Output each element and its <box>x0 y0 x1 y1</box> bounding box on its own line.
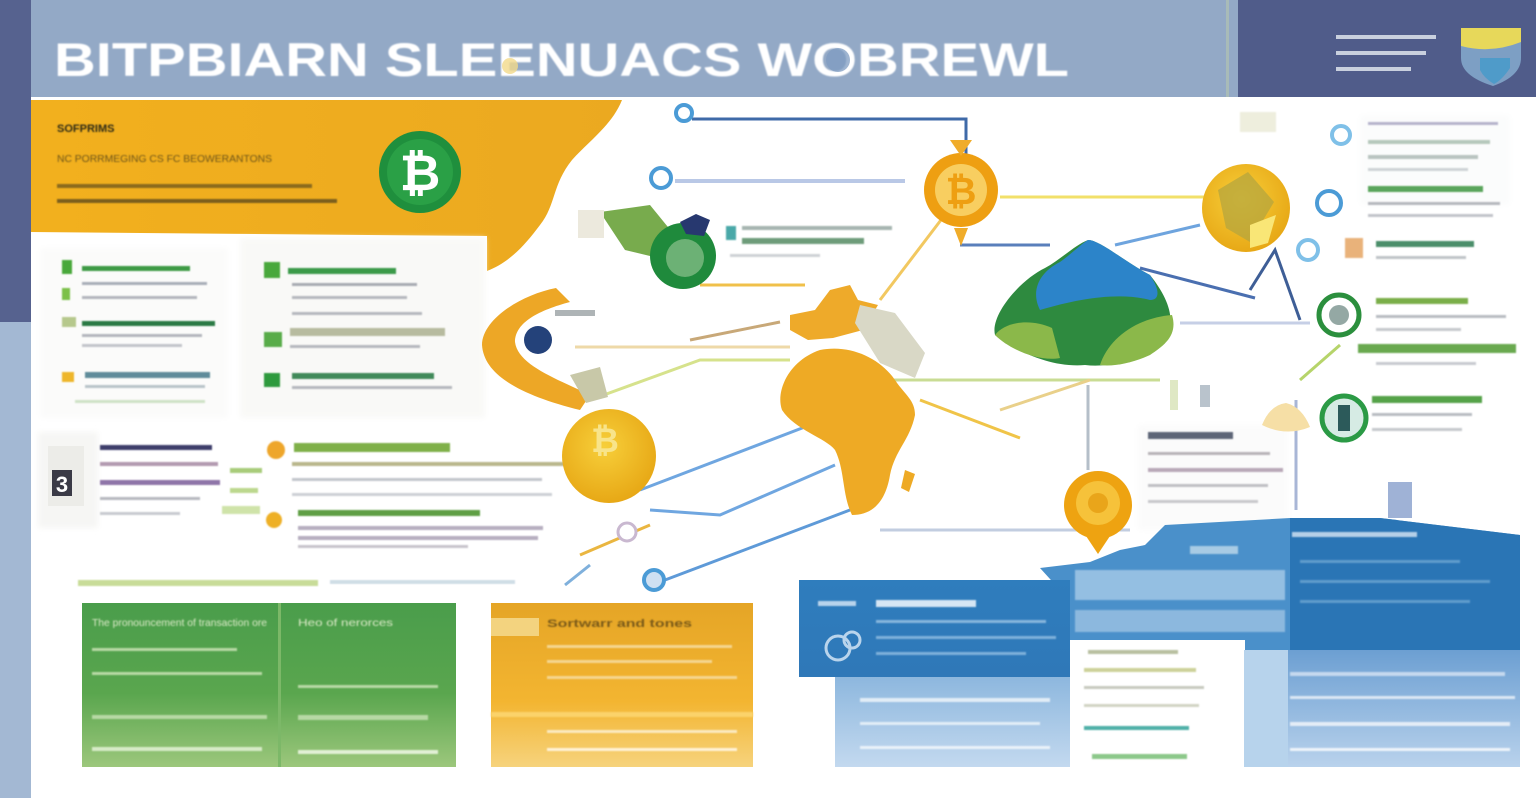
icon: globe coin top right <box>1202 164 1290 252</box>
small map marker <box>1170 380 1210 410</box>
panel: green table: The pronouncement of transaction ore <box>92 617 267 629</box>
connector lines <box>565 119 1340 585</box>
icon: document: 3 <box>56 472 68 497</box>
panel: blue table <box>799 580 1070 767</box>
intro text: NC PORRMEGING CS FC BEOWERANTONS <box>57 153 272 165</box>
panel: white notes card <box>1070 640 1245 767</box>
callout row two <box>266 510 543 548</box>
icon: top gold coin <box>924 140 998 246</box>
icon: green ring top <box>1319 295 1359 335</box>
panel: left feature list <box>40 238 485 418</box>
icon: large yellow coin: ₿ <box>591 422 619 460</box>
list items right <box>264 262 452 389</box>
header legend <box>1336 35 1436 71</box>
icon: green ring bottom <box>1322 396 1366 440</box>
map: curved orange arc <box>482 288 608 410</box>
panel: amber table: Sortwarr and tones <box>547 618 692 630</box>
map: Africa <box>780 349 915 515</box>
node markers <box>618 105 1350 590</box>
icon: large yellow coin <box>562 409 656 503</box>
icon: shield <box>1461 28 1521 86</box>
panel: right callouts <box>1240 112 1516 440</box>
panel: green table <box>82 603 456 767</box>
icon: pale cloud <box>1262 403 1310 432</box>
icon: document <box>48 446 84 506</box>
intro text <box>57 123 337 203</box>
callout row one <box>267 441 564 496</box>
panel: yellow intro <box>31 100 622 271</box>
icon: green marker node <box>578 205 716 289</box>
panel: blue right table <box>1244 650 1520 767</box>
list items left <box>62 260 215 403</box>
label near green marker <box>726 226 892 257</box>
title accent dots <box>502 48 850 74</box>
intro text: SOFPRIMS <box>57 123 114 135</box>
left edge band <box>0 0 31 798</box>
panel: lower-left notes <box>38 432 564 586</box>
icon: green coin <box>379 131 461 213</box>
icon: top gold coin: ₿ <box>946 171 976 213</box>
map: green continent with blue peak <box>994 240 1173 366</box>
icon: orange location coin <box>1064 471 1132 554</box>
icon: green coin: ₿ <box>400 145 440 201</box>
panel: amber table <box>491 603 753 767</box>
title: BITPBIARN SLEENUACS WOBREWL <box>54 33 1069 86</box>
panel: green table: Heo of nerorces <box>298 617 393 629</box>
header banner <box>31 0 1536 97</box>
panel: blue wave block <box>1040 482 1520 650</box>
panel: centre-right text note <box>1138 403 1310 530</box>
icon: network badge <box>826 632 860 660</box>
map: Europe <box>790 285 925 378</box>
